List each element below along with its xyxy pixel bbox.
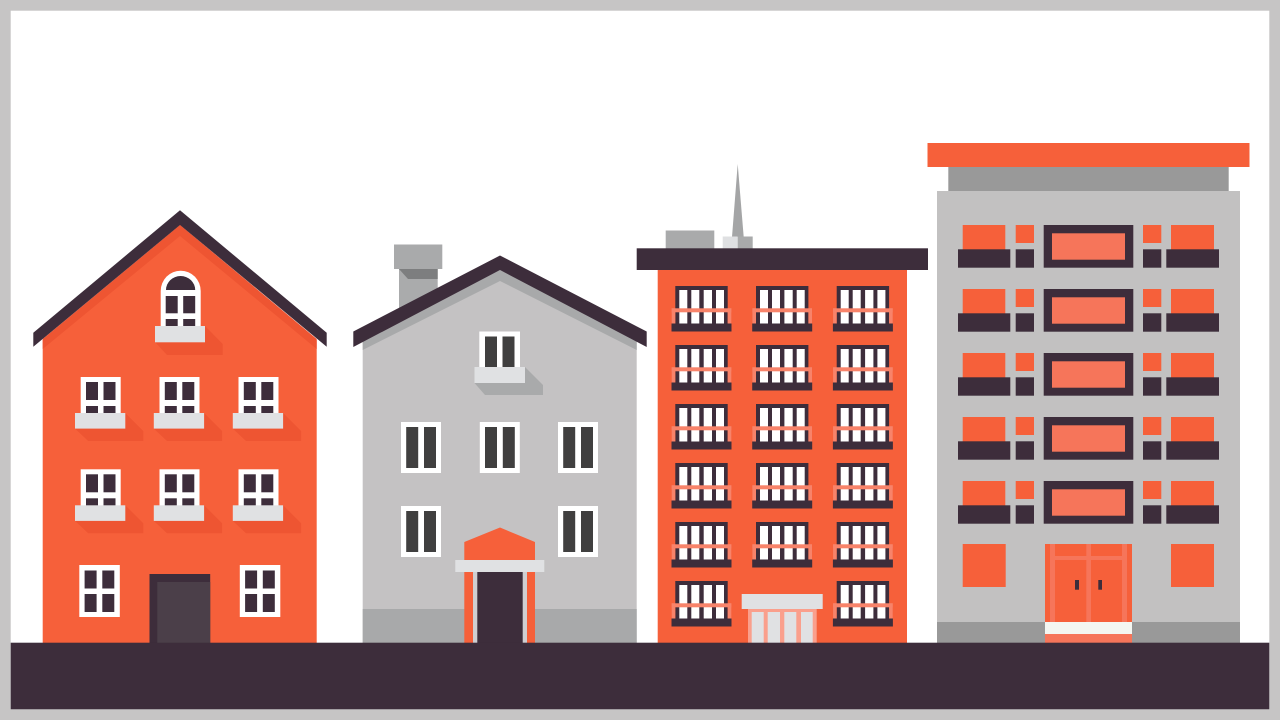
- house 1 middle-row windows with sills: [75, 469, 301, 533]
- tower double door: [1045, 544, 1132, 644]
- house 2 roof shadow: [363, 270, 637, 350]
- building 3: orange apartment block: [637, 164, 928, 644]
- tower roof slab: [928, 143, 1250, 167]
- tower window row 5: [958, 481, 1219, 524]
- balcony windows row 3: [672, 404, 893, 450]
- building 2: grey gabled house: [353, 244, 647, 644]
- house 2 roof: [353, 256, 647, 347]
- building 1: orange gabled house: [33, 210, 327, 644]
- tower window row 4: [958, 417, 1219, 460]
- ground strip: [11, 643, 1269, 709]
- balcony windows row 5: [672, 522, 893, 568]
- house 2 upper windows: [401, 422, 598, 473]
- ground-floor left window: [963, 544, 1006, 587]
- arched attic window: [155, 271, 223, 355]
- tower window row 2: [958, 289, 1219, 332]
- flat roof slab: [637, 248, 928, 270]
- apartment entrance: [742, 594, 823, 644]
- balcony windows row 2: [672, 345, 893, 390]
- tower window row 3: [958, 353, 1219, 396]
- house 2 portico entrance: [455, 528, 544, 644]
- rooftop vents: [666, 230, 753, 248]
- house 1 roof: [33, 210, 327, 347]
- tower base band: [937, 622, 1240, 644]
- rooftop spire: [732, 164, 744, 237]
- house 2 wall: [363, 270, 637, 644]
- house 1 door: [150, 574, 210, 644]
- house 2 lower windows: [401, 506, 598, 557]
- balcony windows row 4: [672, 463, 893, 508]
- house 2 base band: [363, 609, 637, 644]
- balcony windows row 1: [672, 286, 893, 332]
- house 1 ground-floor windows: [79, 565, 280, 617]
- house 1 wall: [43, 225, 317, 644]
- tower wall: [937, 191, 1240, 644]
- balcony windows row 6: [672, 581, 893, 626]
- house 1 upper-row windows with sills: [75, 377, 301, 441]
- chimney: [394, 244, 442, 318]
- tower window row 1: [958, 225, 1219, 268]
- tower upper storey: [948, 166, 1229, 191]
- attic window with sill: [474, 332, 543, 395]
- apartment wall: [658, 268, 907, 644]
- ground-floor right window: [1171, 544, 1214, 587]
- building 4: grey tower: [928, 143, 1250, 644]
- house 1 roof shadow: [43, 225, 317, 349]
